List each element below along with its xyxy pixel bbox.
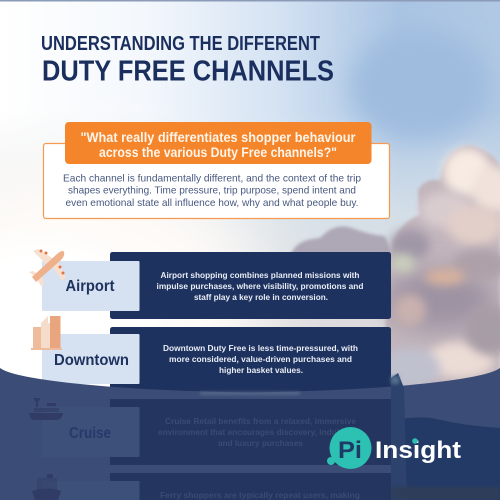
panel: Airport [42,252,391,319]
panel: Airport: staff play a key role in conversion. [194,293,328,302]
title: DUTY FREE CHANNELS [42,56,334,88]
background: sky and clouds [0,0,500,386]
panel: Cruise (faded): environment that encourages discovery, indulgence [158,428,364,437]
intro text box: Each channel is fundamentally different, and the context of the trip [63,172,361,184]
panel: Airport: impulse purchases, where visibility, promotions and [156,282,364,291]
panel: Cruise (faded): and luxury purchases [218,439,304,448]
intro text box: shapes everything. Time pressure, trip purpose, spend intent and [68,184,356,196]
title: UNDERSTANDING THE DIFFERENT [41,32,320,55]
icon: city buildings [31,316,62,350]
panel: Downtown: more considered, value-driven purchases and [169,355,352,364]
question banner: across the various Duty Free channels?" [99,145,337,160]
icon: ferry (faded) [32,474,61,500]
intro text box [44,144,390,218]
panel: Downtown: Downtown [54,352,129,369]
faint light streak between panels [200,392,300,394]
panel: Cruise (faded): Cruise [69,425,111,442]
icon: airplane [29,249,66,286]
panel: Ferry (faded, cropped) [42,473,391,500]
panel: Airport: Airport shopping combines planned missions with [160,271,360,280]
icon: cruise ship (faded) [29,398,63,420]
panel: Cruise (faded) [42,399,391,465]
question banner [65,122,372,164]
panel: Airport: Airport [66,278,115,295]
panel: Downtown: Downtown Duty Free is less time-pressured, with [163,344,358,353]
panel: Downtown [42,327,391,393]
logo: Pi Insight [327,427,461,469]
intro text box: even emotional state all influence how, why and what people buy. [66,197,358,209]
panel: Cruise (faded): Cruise Retail benefits from a relaxed, immersive [165,417,357,426]
panel: question intro [44,122,390,218]
background hill and tower under overlay [391,373,500,500]
question banner: "What really differentiates shopper behaviour [80,130,356,145]
logo: Pi Insight: Pi [338,437,362,464]
logo: Pi Insight: Insight [375,437,461,464]
panel: Ferry (faded, cropped): Ferry shoppers are typically repeat users, making [160,491,360,500]
bottom overlay: dark curved band [0,368,500,500]
panel: Downtown: higher basket values. [219,366,303,375]
title [41,32,334,88]
